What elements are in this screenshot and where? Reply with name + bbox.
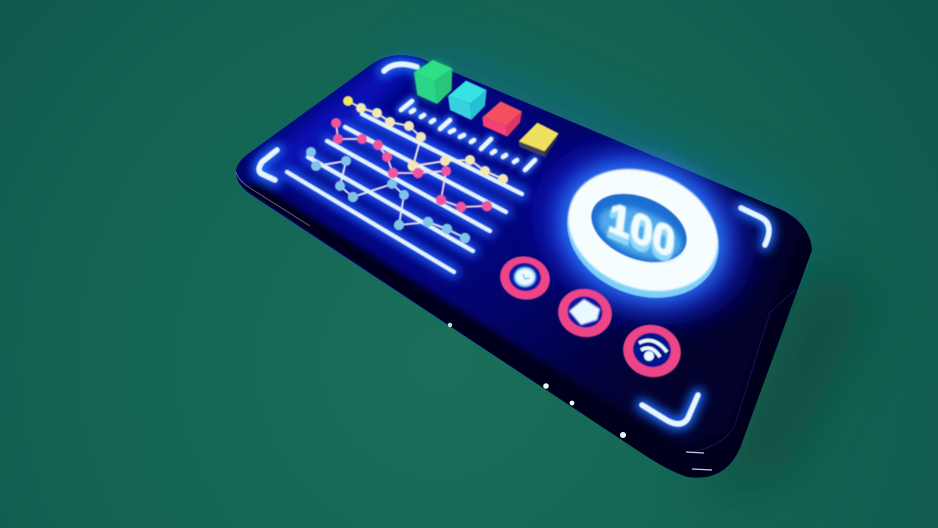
- button: clock: [496, 252, 554, 304]
- cube: cyan: [448, 81, 487, 120]
- phone shadow: [700, 260, 870, 490]
- corner brackets: [259, 64, 769, 424]
- score value: 100: [606, 193, 678, 268]
- button: wifi: [618, 319, 686, 383]
- score ring with 100: [535, 134, 751, 330]
- side buttons: [448, 323, 712, 470]
- chart rows: [287, 114, 522, 272]
- phone body: [230, 55, 825, 490]
- tick marks: [401, 101, 535, 170]
- cube: red: [482, 101, 522, 137]
- cube: green: [414, 60, 452, 104]
- score value: 100: [605, 198, 677, 273]
- line series: yellow: [343, 96, 508, 184]
- cube: yellow: [519, 123, 559, 157]
- background glow: [400, 50, 815, 270]
- line series: pink: [331, 118, 492, 212]
- line series: blue: [306, 147, 470, 243]
- button: message: [554, 284, 616, 342]
